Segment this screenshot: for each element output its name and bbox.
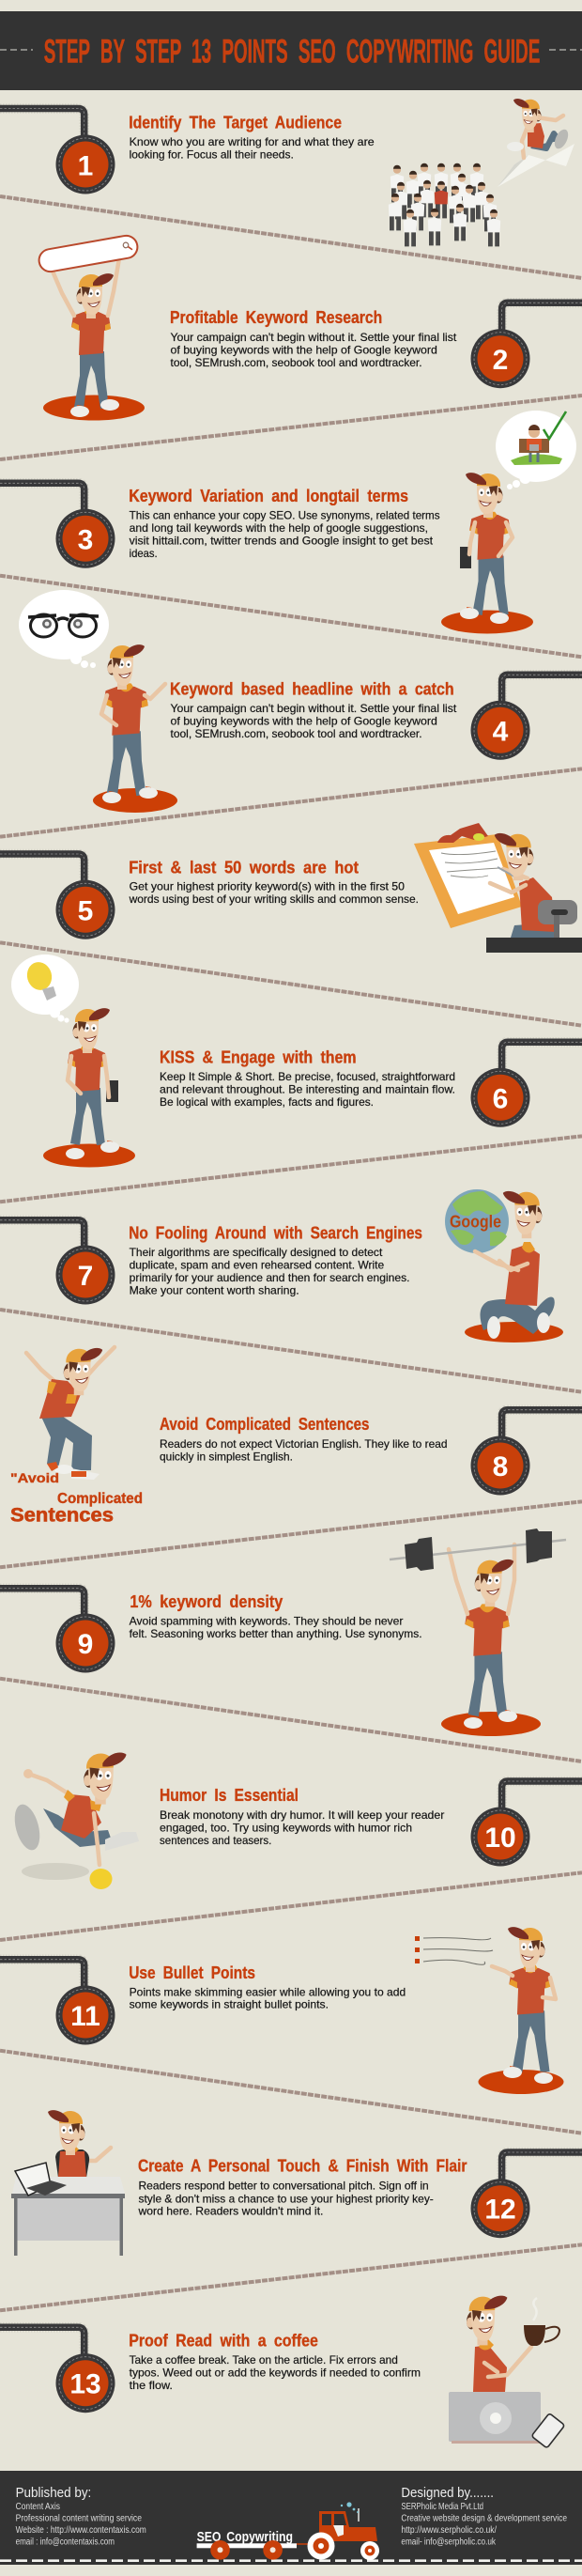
body text: ideas.: [130, 548, 158, 560]
step 12: [11, 2110, 582, 2256]
road and number badge 1: 1: [78, 150, 93, 182]
body text: duplicate, spam and even rehearsed content. Write: [130, 1259, 384, 1271]
body text: of buying keywords with the help of Google keyword: [171, 715, 437, 727]
body text: This can enhance your copy SEO. Use synonyms, related terms: [130, 510, 440, 522]
body text: style & don't miss a chance to use your highest priority key-: [139, 2193, 434, 2205]
road and number badge 12: 12: [484, 2195, 516, 2226]
illustration: bullet list: [415, 1936, 493, 1964]
heading: Keyword Variation and longtail terms: [129, 486, 408, 505]
body text: visit hittail.com, twitter trends and Google insight to get best: [130, 535, 434, 547]
illustration: guy holding Google globe: [445, 1189, 563, 1342]
illustration: guy jumping: [26, 1347, 115, 1480]
road and number badge 11: 11: [70, 2001, 100, 2032]
road and number badge 13: [0, 2327, 115, 2413]
body text: words using best of your writing skills and common sense.: [129, 893, 419, 906]
step 1: [0, 99, 574, 246]
road and number badge 6: 6: [493, 1084, 508, 1114]
published by: [16, 2485, 146, 2547]
step 11: [0, 1927, 563, 2094]
road and number badge 1: [0, 109, 115, 194]
body text: [130, 1615, 422, 1640]
designed by: http://www.serpholic.co.uk/: [401, 2525, 497, 2536]
published by: Content Axis: [16, 2502, 60, 2512]
designed by: email- info@serpholic.co.uk: [401, 2537, 497, 2547]
road and number badge 2: 2: [493, 345, 508, 376]
road and number badge 5: 5: [78, 896, 93, 926]
illustration: guy at desk with laptop: [11, 2110, 125, 2256]
road and number badge 8: 8: [493, 1451, 508, 1482]
laptop: [449, 2392, 541, 2444]
heading: Profitable Keyword Research: [170, 307, 382, 327]
illustration: guy lifting search bar: [38, 234, 145, 421]
body text: [160, 1071, 455, 1109]
body text: Know who you are writing for and what they are: [130, 136, 375, 148]
illustration: guy at drafting board: [414, 823, 582, 953]
designed by: SERPholic Media Pvt.Ltd: [401, 2502, 483, 2512]
heading: Avoid Complicated Sentences: [160, 1414, 369, 1434]
footer band: [0, 2471, 582, 2565]
illustration: guy with book: [43, 1008, 135, 1167]
heading: Create A Personal Touch & Finish With Flair: [138, 2156, 467, 2176]
body text: Make your content worth sharing.: [130, 1285, 299, 1297]
illustration: guy gesturing: [93, 644, 177, 813]
body text: [160, 1438, 447, 1464]
illustration: guy with book: [441, 473, 533, 633]
heading: KISS & Engage with them: [160, 1047, 357, 1067]
step 7: [0, 1189, 563, 1342]
search bar: [38, 234, 139, 273]
body text: and relevant throughout. Be interesting and maintain flow.: [160, 1083, 455, 1095]
published by: Professional content writing service: [16, 2514, 142, 2524]
step 8: [10, 1347, 582, 1526]
body text: Get your highest priority keyword(s) with in the first 50: [130, 880, 405, 892]
road and number badge 11: [0, 1960, 115, 2044]
road and number badge 12: [471, 2152, 582, 2238]
road and number badge 7: [0, 1220, 115, 1304]
body text: quickly in simplest English.: [160, 1451, 293, 1464]
heading: Keyword based headline with a catch: [170, 678, 454, 698]
illustration: thought bubble with bench: [496, 411, 576, 489]
illustration: guy lifting barbell: [390, 1529, 566, 1736]
road and number badge 13: 13: [69, 2369, 101, 2400]
illustration: jumbled words: [10, 1470, 143, 1526]
road and number badge 8: [471, 1410, 582, 1496]
heading: Identify The Target Audience: [129, 113, 342, 132]
illustration: jumbled words: Sentences: [10, 1504, 114, 1526]
illustration: thought bubble with light bulb: [11, 954, 79, 1023]
tractor logo: [197, 2502, 379, 2560]
body text: typos. Weed out or add the keywords if needed to confirm: [130, 2367, 421, 2380]
body text: [130, 1986, 406, 2011]
body text: primarily for your audience and then for search engines.: [130, 1272, 409, 1284]
body text: Readers do not expect Victorian English. They like to read: [160, 1438, 447, 1451]
body text: and long tail keywords with the help of google suggestions,: [130, 522, 428, 535]
illustration: guy with coffee and laptop: [449, 2296, 565, 2448]
body text: engaged, too. Try using keywords with humor rich: [160, 1823, 412, 1835]
illustration: guy pointing at list: [479, 1927, 563, 2094]
road and number badge 3: 3: [78, 524, 93, 556]
heading: Use Bullet Points: [129, 1963, 255, 1982]
road and number badge 10: [471, 1781, 582, 1866]
body text: tool, SEMrush.com, seobook tool and wordtracker.: [171, 728, 422, 740]
header band: [0, 11, 582, 90]
step 3: [0, 411, 576, 633]
body text: some keywords in straight bullet points.: [130, 1999, 329, 2011]
body text: felt. Seasoning works better than anything. Use synonyms.: [130, 1628, 422, 1640]
published by: Website : http://www.contentaxis.com: [16, 2525, 146, 2536]
body text: Be logical with examples, facts and figures.: [160, 1096, 374, 1109]
body text: Break monotony with dry humor. It will keep your reader: [160, 1809, 444, 1822]
road and number badge 3: [0, 483, 115, 568]
body text: Your campaign can't begin without it. Settle your final list: [171, 703, 457, 715]
body text: [130, 1247, 409, 1297]
road and number badge 9: [0, 1589, 115, 1672]
body text: sentences and teasers.: [160, 1835, 271, 1847]
road and number badge 5: [0, 854, 115, 939]
road and number badge 4: [471, 675, 582, 760]
step 9: [0, 1529, 566, 1736]
step 4: [19, 590, 582, 813]
step 5: [0, 823, 582, 953]
illustration: crowd of people: [389, 163, 500, 246]
designed by: [401, 2485, 567, 2547]
road and number badge 7: 7: [78, 1261, 93, 1292]
heading: No Fooling Around with Search Engines: [129, 1223, 422, 1243]
designed by: Designed by.......: [401, 2485, 494, 2501]
body text: Avoid spamming with keywords. They should be never: [130, 1615, 404, 1627]
body text: the flow.: [130, 2380, 173, 2392]
heading: First & last 50 words are hot: [129, 857, 359, 877]
body text: word here. Readers wouldn't mind it.: [137, 2206, 323, 2218]
illustration: thought bubble with glasses: [19, 590, 109, 668]
step 2: [38, 234, 582, 421]
body text: [130, 2354, 421, 2392]
road and number badge 6: [471, 1042, 582, 1127]
published by: Published by:: [16, 2485, 91, 2501]
body text: of buying keywords with the help of Google keyword: [171, 344, 437, 356]
road and number badge 10: 10: [484, 1823, 516, 1854]
body text: Keep It Simple & Short. Be precise, focused, straightforward: [160, 1071, 455, 1083]
body text: [171, 332, 457, 369]
heading: Humor Is Essential: [160, 1785, 299, 1805]
body text: [160, 1809, 444, 1847]
step 10: [10, 1752, 582, 1889]
body text: Your campaign can't begin without it. Settle your final list: [171, 332, 457, 344]
illustration: guy on paper plane: [498, 99, 574, 187]
road and number badge 4: 4: [493, 716, 509, 748]
illustration: guy holding Google globe: Google: [450, 1213, 501, 1232]
heading: 1% keyword density: [130, 1591, 283, 1611]
body text: [129, 880, 419, 906]
step 13: [0, 2296, 565, 2448]
body text: Take a coffee break. Take on the article. Fix errors and: [130, 2354, 398, 2367]
step 6: [11, 954, 582, 1167]
body text: Readers respond better to conversational pitch. Sign off in: [139, 2180, 429, 2193]
road and number badge 9: 9: [78, 1629, 93, 1660]
illustration: guy picking up a coin: [10, 1752, 139, 1889]
body text: [171, 703, 457, 740]
body text: tool, SEMrush.com, seobook tool and wordtracker.: [171, 357, 422, 369]
tractor logo: SEO Copywriting: [197, 2529, 293, 2545]
body text: [130, 136, 375, 162]
body text: Their algorithms are specifically designed to detect: [130, 1247, 383, 1259]
published by: email : info@contentaxis.com: [16, 2537, 115, 2547]
tablet: [531, 2413, 565, 2448]
body text: Points make skimming easier while allowing you to add: [130, 1986, 406, 1998]
heading: Proof Read with a coffee: [129, 2331, 318, 2351]
body text: [137, 2180, 434, 2218]
body text: looking for. Focus all their needs.: [130, 149, 294, 162]
illustration: jumbled words: "Avoid: [10, 1470, 59, 1485]
illustration: jumbled words: Complicated: [57, 1491, 143, 1507]
road and number badge 2: [471, 303, 582, 388]
body text: [130, 510, 440, 560]
